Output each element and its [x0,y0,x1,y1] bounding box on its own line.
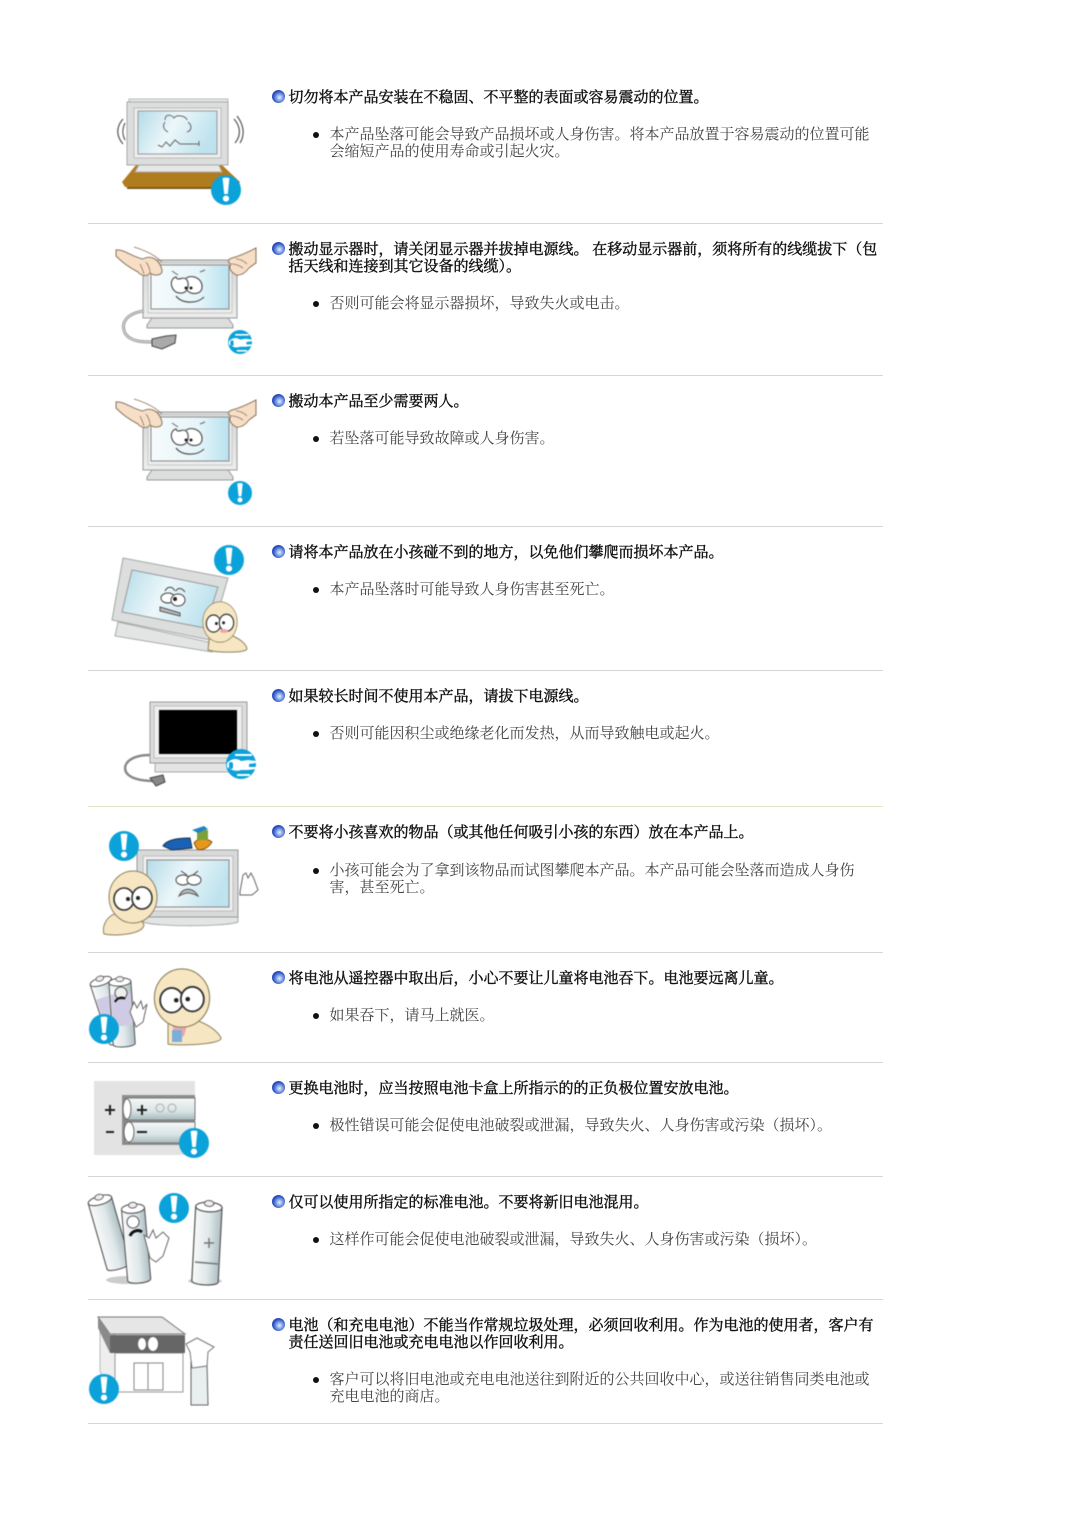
row 4: keep away from children [88,544,883,671]
illustration: hands lifting monitor with cable [114,246,258,355]
list item: 否则可能因积尘或绝缘老化而发热，从而导致触电或起火。 [330,726,720,742]
icon: warning [109,831,139,861]
bullet icon [272,545,285,558]
heading: 电池（和充电电池）不能当作常规垃圾处理，必须回收利用。作为电池的使用者，客户有 [288,1318,874,1334]
illustration: hands lifting monitor [114,398,258,506]
list item: 本产品坠落时可能导致人身伤害甚至死亡。 [330,582,615,598]
row 7: batteries away from children [88,968,883,1063]
heading: 搬动显示器时，请关闭显示器并拔掉电源线。 在移动显示器前，须将所有的线缆拔下（包 [288,242,877,258]
bullet icon [272,1195,285,1208]
heading [288,1317,874,1351]
heading: 仅可以使用所指定的标准电池。不要将新旧电池混用。 [288,1195,649,1211]
list item: 否则可能会将显示器损坏，导致失火或电击。 [330,296,630,312]
list item: 小孩可能会为了拿到该物品而试图攀爬本产品。本产品可能会坠落而造成人身伤 [330,863,855,879]
bullet icon [272,689,285,702]
list item: 如果吞下，请马上就医。 [330,1008,495,1024]
list item: 充电电池的商店。 [330,1389,450,1405]
heading: 责任送回旧电池或充电电池以作回收利用。 [288,1335,574,1351]
list item: 客户可以将旧电池或充电电池送往到附近的公共回收中心，或送往销售同类电池或 [330,1372,870,1388]
heading: 请将本产品放在小孩碰不到的地方，以免他们攀爬而损坏本产品。 [288,545,724,561]
list item: 本产品坠落可能会导致产品损坏或人身伤害。将本产品放置于容易震动的位置可能 [330,127,870,143]
heading [288,241,877,275]
icon: warning [159,1193,189,1223]
illustration: shaking monitor on wooden base [116,98,244,206]
icon: warning [89,1374,119,1404]
icon: warning [179,1128,209,1158]
list item [313,126,870,160]
icon: warning [89,1014,119,1044]
row 1: unstable surface warning [88,89,883,224]
heading: 将电池从遥控器中取出后，小心不要让儿童将电池吞下。电池要远离儿童。 [288,971,784,987]
row 10: battery recycling [88,1316,883,1424]
icon: warning [228,481,252,505]
bullet icon [272,825,285,838]
illustration: baby tipping monitor [111,544,248,654]
illustration: battery tray with polarity [94,1080,210,1159]
list item: 害，甚至死亡。 [330,880,435,896]
list item: 极性错误可能会促使电池破裂或泄漏，导致失火、人身伤害或污染（损坏）。 [330,1118,832,1134]
icon: unplug [226,749,256,779]
list item [313,1371,870,1405]
list item: 若坠落可能导致故障或人身伤害。 [330,431,555,447]
bullet icon [272,1081,285,1094]
list item [313,862,855,896]
heading: 如果较长时间不使用本产品，请拔下电源线。 [288,689,589,705]
row 3: two people to move [88,393,883,527]
bullet icon [272,242,285,255]
bullet icon [272,90,285,103]
bullet icon [272,394,285,407]
heading: 搬动本产品至少需要两人。 [288,394,469,410]
illustration: old and new batteries [87,1192,224,1286]
icon: warning [211,175,241,205]
icon: warning [214,545,244,575]
heading: 更换电池时，应当按照电池卡盒上所指示的的正负极位置安放电池。 [288,1081,739,1097]
row 8: battery polarity [88,1080,883,1177]
bullet icon [272,971,285,984]
row 9: use specified batteries [87,1192,883,1300]
bullet icon [272,1318,285,1331]
row 2: unplug before moving [88,241,883,376]
row 6: no toys on product [88,824,883,953]
heading: 切勿将本产品安装在不稳固、不平整的表面或容易震动的位置。 [288,90,709,106]
illustration: recycling shop and battery [88,1316,216,1406]
row 5: unplug when unused [88,688,883,807]
illustration: black screen monitor with cable [123,701,257,788]
heading: 不要将小孩喜欢的物品（或其他任何吸引小孩的东西）放在本产品上。 [288,825,754,841]
illustration: batteries and baby [88,968,222,1048]
heading: 括天线和连接到其它设备的线缆）。 [288,259,521,275]
illustration: baby, monitor and toys [102,825,260,936]
list item: 这样作可能会促使电池破裂或泄漏，导致失火、人身伤害或污染（损坏）。 [330,1232,817,1248]
icon: unplug [228,330,252,354]
list item: 会缩短产品的使用寿命或引起火灾。 [330,144,570,160]
